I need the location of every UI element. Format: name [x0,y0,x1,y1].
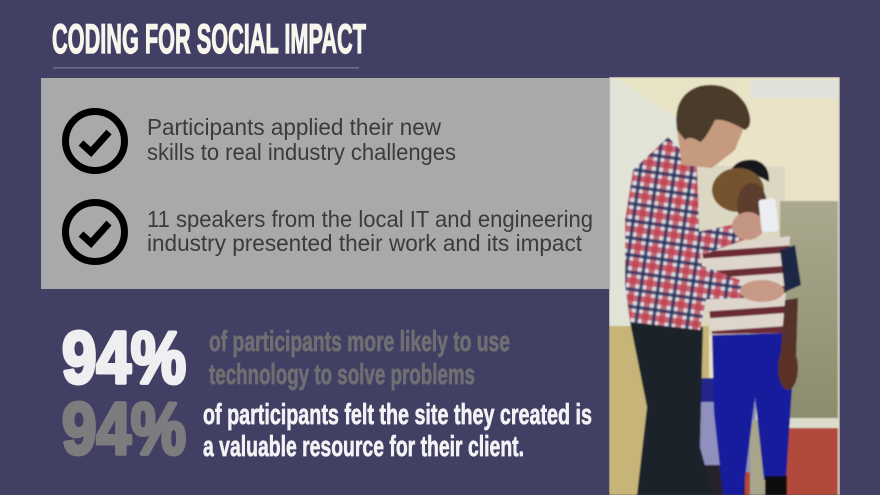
stat: 94% valuable resource: a valuable resource for their client. [203,431,524,463]
text: real industry challenges: Participants applied their new [147,114,441,140]
text: speakers: industry presented their work and its impact [147,230,583,256]
woman [702,160,801,495]
stat: 94% valuable resource: of participants felt the site they created is [203,399,592,431]
stat: 94% more likely: technology to solve problems [209,359,475,391]
text: real industry challenges [147,114,456,165]
text: speakers: 11 speakers from the local IT and engineering [147,206,593,232]
stat: 94% valuable resource: 94% [62,389,186,470]
title: CODING FOR SOCIAL IMPACT [52,15,366,62]
icon: check circle two [66,202,124,262]
stat: 94% more likely [62,318,510,399]
stat: 94% more likely: of participants more likely to use [209,326,510,358]
phone [758,198,779,233]
man [625,85,784,495]
panel: key points [41,78,609,289]
stat: 94% more likely: 94% [62,318,186,399]
photo: two people testing a phone app [609,77,840,495]
icon: check circle one [66,112,124,170]
text: real industry challenges: skills to real industry challenges [147,139,456,165]
stat: 94% valuable resource [62,389,592,470]
text: speakers [147,206,593,256]
